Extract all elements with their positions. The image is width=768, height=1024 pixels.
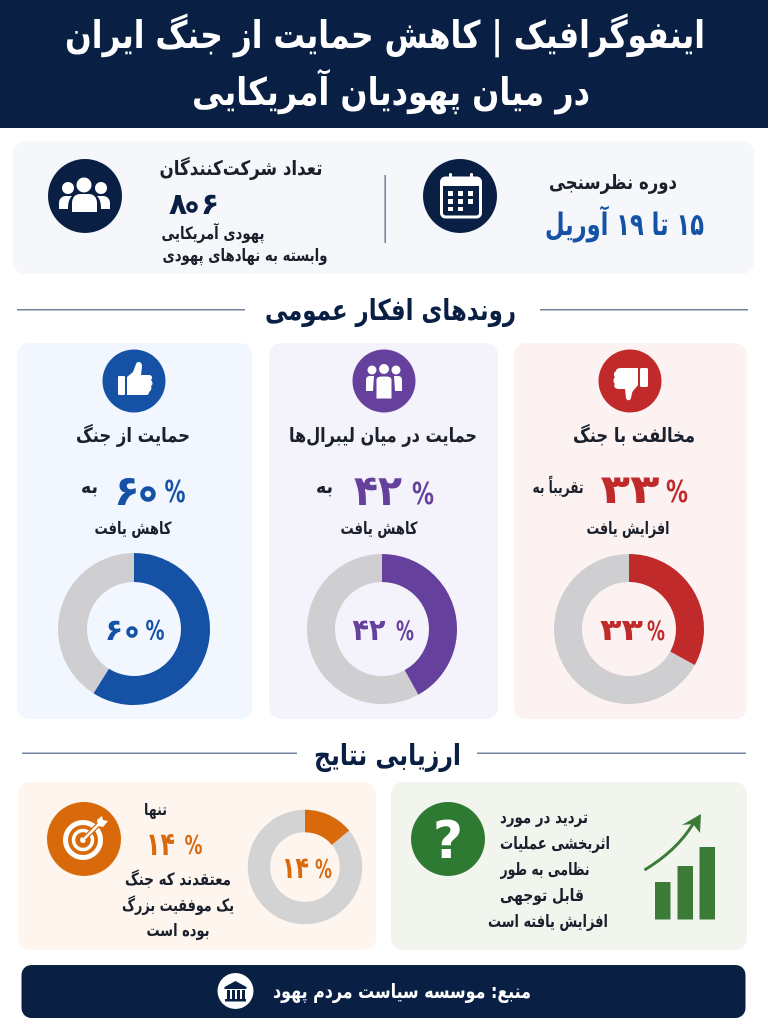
panel: support among liberals: کاهش یافت — [340, 519, 418, 539]
text: only 14 percent: % — [184, 831, 202, 861]
footer: source: منبع: موسسه سیاست مردم پهود — [273, 979, 531, 1004]
title banner — [0, 0, 768, 128]
panel: growing doubt — [391, 782, 747, 950]
title banner: در میان پهودیان آمریکایی — [192, 68, 590, 114]
donut chart: 42 percent: ۴۲ — [352, 613, 386, 648]
donut chart: 33 percent: % — [647, 616, 665, 647]
text: doubts about effectiveness: افزایش یافته است — [488, 912, 608, 932]
icon: thumbs down — [598, 350, 662, 412]
survey period text: ۱۵ تا ۱۹ آوریل — [545, 205, 704, 243]
donut chart: 14 percent: % — [315, 855, 332, 885]
icon: calendar — [423, 159, 497, 233]
icon: participants — [48, 159, 122, 233]
participants text — [160, 156, 328, 266]
icon: question mark: ? — [433, 811, 463, 871]
panel: support for the war: حمایت از جنگ — [76, 423, 190, 447]
stat: 60 percent: ۶۰ — [114, 466, 161, 515]
stat: about 33 percent: % — [666, 475, 688, 510]
participants text: تعداد شرکت‌کنندگان — [160, 156, 322, 180]
text: doubts about effectiveness: تردید در مورد — [500, 808, 588, 828]
text: only 14 percent: بوده است — [146, 921, 210, 941]
donut chart: 33 percent: ۳۳ — [600, 613, 643, 648]
stat: 60 percent: به — [81, 476, 98, 498]
panel: opposition to the war: افزایش یافت — [586, 519, 670, 539]
donut chart: 14 percent: ۱۴ — [282, 851, 309, 886]
donut chart: 42 percent — [321, 568, 443, 690]
panel: opposition to the war: مخالفت با جنگ — [573, 423, 695, 447]
text: only 14 percent — [122, 800, 234, 941]
icon: institution building — [218, 973, 254, 1009]
donut chart: 60 percent — [72, 568, 196, 690]
text: doubts about effectiveness: قابل توجهی — [500, 886, 584, 906]
stat: 42 percent — [316, 466, 434, 515]
stat: about 33 percent: ۳۳ — [600, 467, 660, 513]
survey period text — [545, 170, 704, 243]
icon: group of people — [352, 350, 416, 412]
participants text: وابسته به نهادهای پهودی — [162, 246, 328, 266]
donut chart: 60 percent: % — [146, 616, 164, 646]
stat: about 33 percent: تقریباً به — [532, 474, 584, 498]
participants text: ۸۰۶ — [169, 187, 219, 222]
heading: public opinion trends: روندهای افکار عمومی — [265, 293, 516, 327]
text: doubts about effectiveness — [488, 808, 610, 932]
survey period text: دوره نظرسنجی — [549, 170, 677, 194]
text: only 14 percent: معتقدند که جنگ — [125, 869, 231, 890]
icon: target — [47, 802, 121, 876]
icon: question mark — [411, 802, 485, 876]
text: only 14 percent: یک موفقیت بزرگ — [122, 896, 234, 916]
panel: opposition to the war — [514, 343, 747, 719]
panel: support for the war — [17, 343, 252, 719]
panel: 14 percent success — [18, 782, 376, 950]
text: only 14 percent: تنها — [144, 800, 167, 819]
icon: rising bar chart with arrow — [644, 814, 715, 920]
donut chart: 60 percent: ۶۰ — [105, 613, 141, 648]
stat: 42 percent: % — [412, 477, 434, 512]
heading: evaluating results: ارزیابی نتایج — [314, 738, 461, 772]
participants text: پهودی آمریکایی — [162, 222, 264, 244]
text: only 14 percent: ۱۴ — [146, 825, 175, 863]
stat: 42 percent: ۴۲ — [354, 466, 402, 515]
stat: about 33 percent — [532, 467, 688, 513]
stat: 60 percent: % — [164, 475, 186, 510]
donut chart: 14 percent — [259, 821, 351, 913]
stat: 42 percent: به — [316, 476, 333, 498]
panel: support for the war: کاهش یافت — [94, 519, 172, 539]
text: doubts about effectiveness: نظامی به طور — [500, 860, 590, 880]
stat: 60 percent — [81, 466, 186, 515]
panel: survey info — [13, 141, 754, 274]
panel: support among liberals: حمایت در میان لیبرال‌ها — [289, 423, 477, 447]
text: doubts about effectiveness: اثربخشی عملیات — [500, 834, 610, 854]
panel: support among liberals — [269, 343, 498, 719]
donut chart: 33 percent — [568, 568, 690, 690]
footer: source — [22, 965, 746, 1018]
icon: thumbs up — [102, 350, 166, 412]
donut chart: 42 percent: % — [396, 616, 414, 647]
